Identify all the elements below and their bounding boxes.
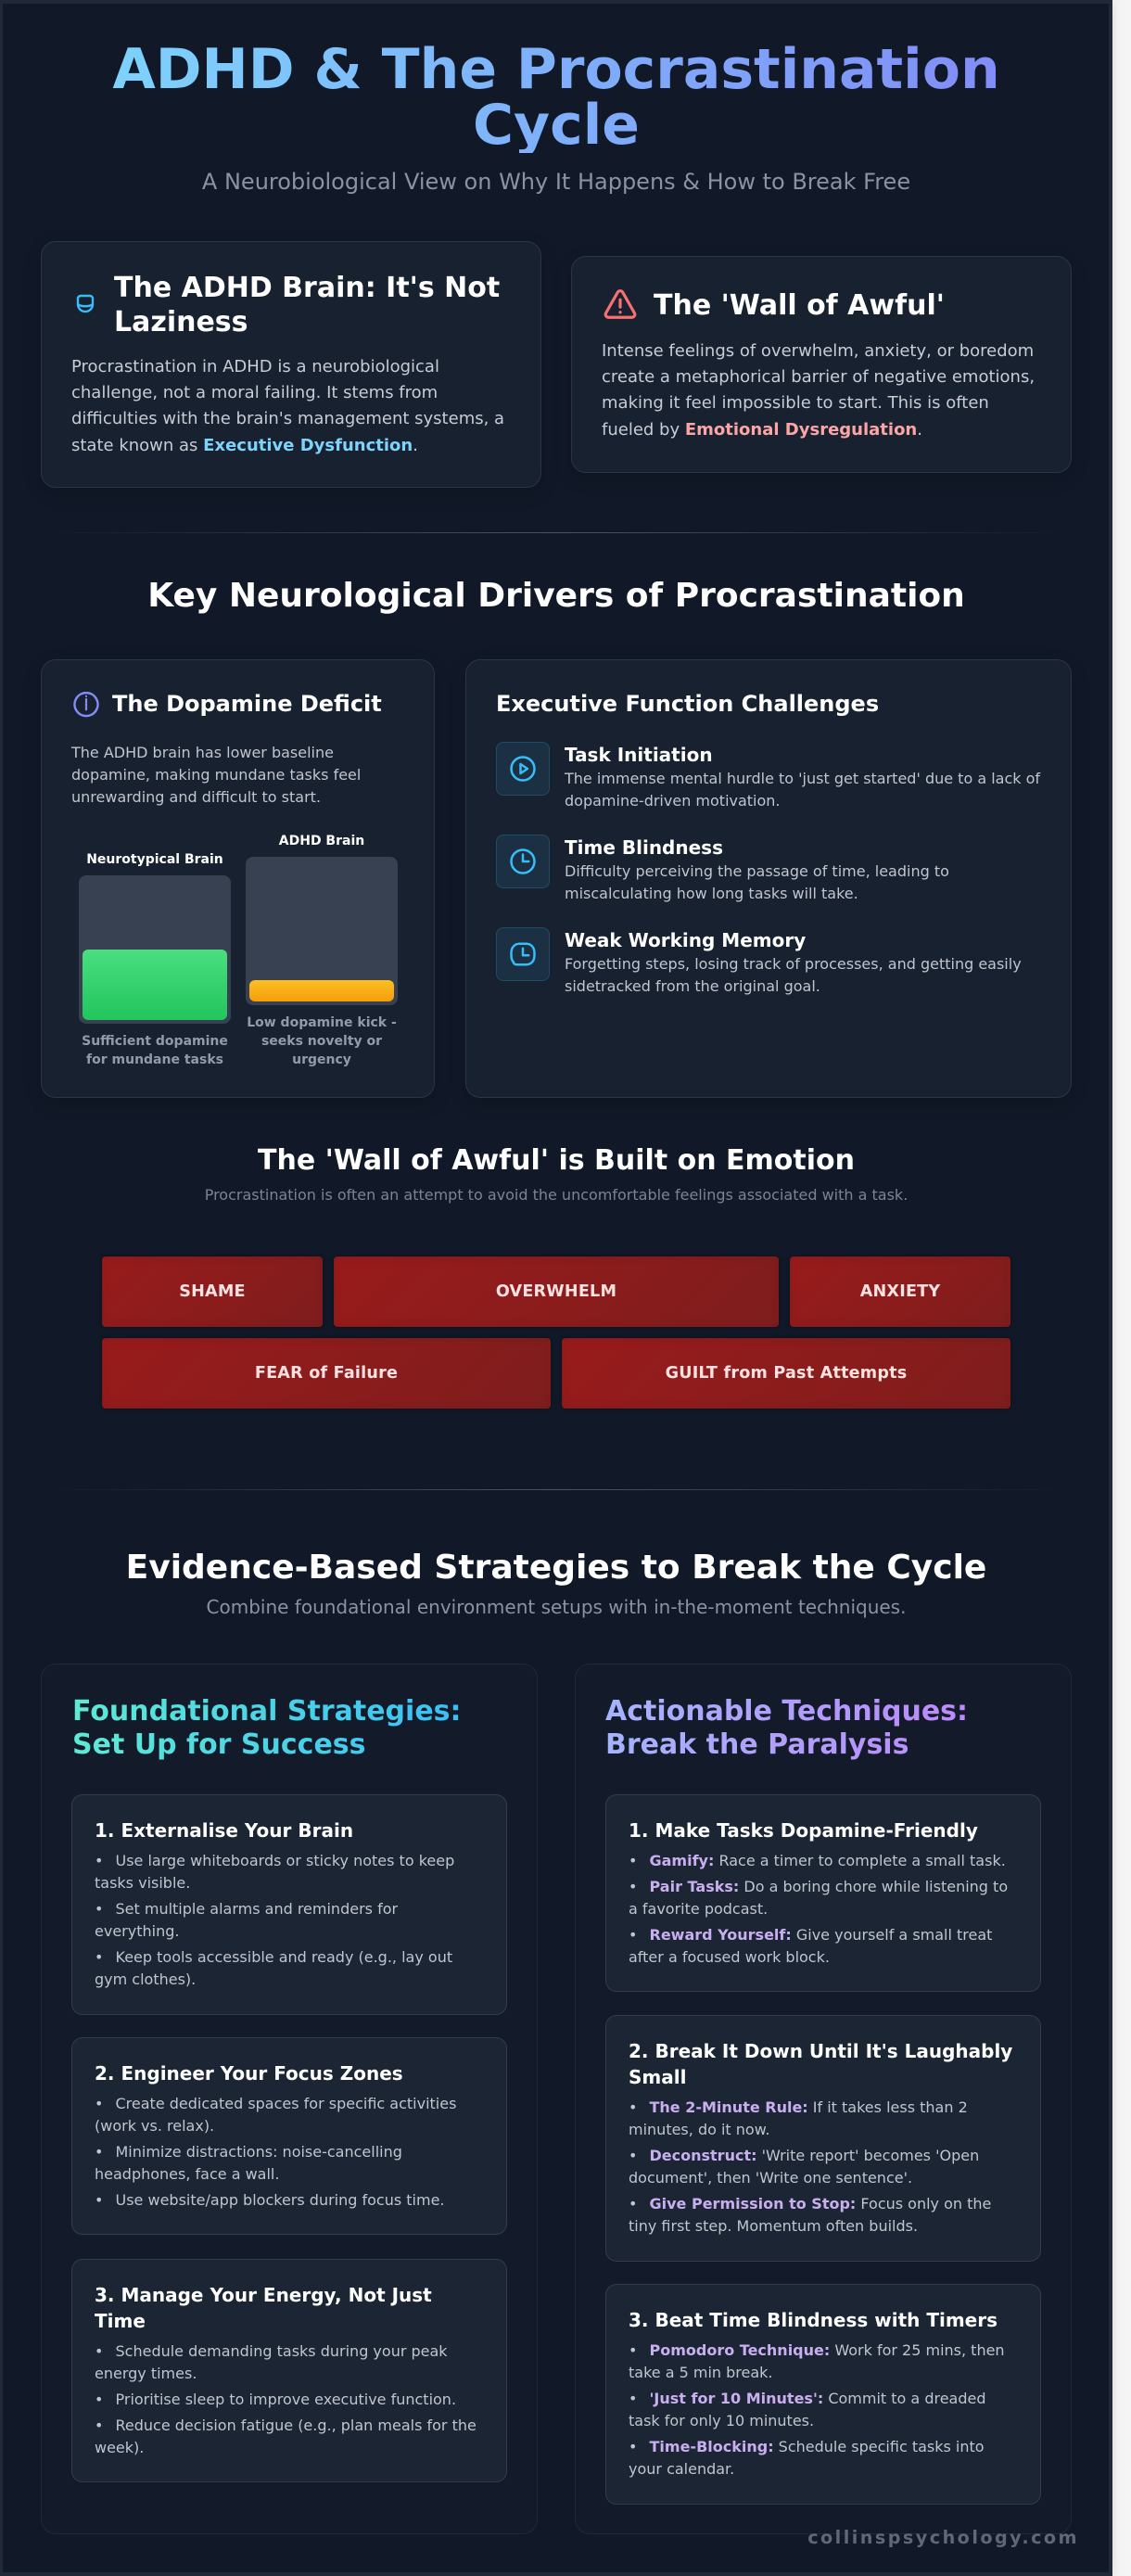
card list: • [629, 2195, 637, 2213]
card list: • [629, 2147, 637, 2164]
card list: • [629, 2341, 637, 2359]
card list: Pair Tasks: Do a boring chore while listening to a favorite podcast. [629, 1878, 1008, 1918]
card list: The 2-Minute Rule: If it takes less than 2 minutes, do it now. [629, 2098, 968, 2138]
section subheading: Procrastination is often an attempt to avoid the uncomfortable feelings associated with a task. [205, 1186, 908, 1204]
bar caption: Low dopamine kick - seeks novelty or urgency [247, 1015, 397, 1067]
card list: • [95, 2143, 103, 2161]
icon: info circle [73, 692, 99, 718]
heading: foundational strategies: Foundational Strategies: Set Up for Success [72, 1695, 462, 1761]
panel: the ADHD brain [41, 241, 541, 488]
bar fill [249, 980, 394, 1001]
panel heading: The Dopamine Deficit [112, 691, 382, 717]
card list: • [629, 1926, 637, 1944]
bar [246, 857, 398, 1005]
section heading: strategies: Evidence-Based Strategies to Break the Cycle [126, 1549, 986, 1587]
text: task initiation: The immense mental hurdle to 'just get started' due to a lack of dopamine-driven motivation. [565, 770, 1040, 810]
card list [95, 2342, 477, 2456]
card list: Deconstruct: 'Write report' becomes 'Open document', then 'Write one sentence'. [629, 2147, 979, 2187]
card list [95, 1852, 454, 1988]
card list: • [95, 1852, 103, 1869]
card list: • [95, 2095, 103, 2112]
card: externalise [71, 1794, 507, 2015]
card list: Pomodoro Technique: Work for 25 mins, then take a 5 min break. [629, 2341, 1005, 2381]
brick: shame: SHAME [179, 1282, 246, 1301]
text: time blindness: Time Blindness [565, 836, 723, 859]
heading: actionable techniques: Actionable Techniques: Break the Paralysis [605, 1695, 968, 1761]
panel text: Procrastination in ADHD is a neurobiological challenge, not a moral failing. It stems from difficulties with the brain's management systems, a state known as Executive Dysfunction. [71, 357, 504, 455]
card list: Give Permission to Stop: Focus only on the tiny first step. Momentum often builds. [629, 2195, 991, 2235]
brick: shame [102, 1256, 323, 1327]
card list: Reduce decision fatigue (e.g., plan meals for the week). [95, 2417, 477, 2456]
section heading: wall of emotion: The 'Wall of Awful' is Built on Emotion [258, 1144, 855, 1177]
card list: Prioritise sleep to improve executive function. [115, 2391, 456, 2408]
text: working memory [565, 929, 1022, 995]
section subheading: Combine foundational environment setups with in-the-moment techniques. [207, 1596, 906, 1618]
card list: Create dedicated spaces for specific activities (work vs. relax). [95, 2095, 456, 2135]
card list [95, 2095, 456, 2209]
brick: overwhelm: OVERWHELM [496, 1282, 616, 1301]
card list: • [95, 2417, 103, 2434]
icon: clock [496, 835, 550, 888]
heading: executive function: Executive Function Challenges [496, 691, 879, 717]
card list: • [95, 2342, 103, 2360]
text: working memory: Weak Working Memory [565, 929, 806, 951]
brick: guilt [562, 1338, 1010, 1409]
card list: • [629, 1878, 637, 1895]
card list: Minimize distractions: noise-cancelling headphones, face a wall. [95, 2143, 402, 2183]
card list: Use website/app blockers during focus time. [115, 2191, 445, 2209]
brick: fear [102, 1338, 551, 1409]
icon: memory [496, 927, 550, 981]
card list: • [95, 2191, 103, 2209]
subtitle: A Neurobiological View on Why It Happens & How to Break Free [202, 169, 910, 195]
card list: Keep tools accessible and ready (e.g., lay out gym clothes). [95, 1948, 452, 1988]
card: energy [71, 2259, 507, 2482]
panel text: The ADHD brain has lower baseline dopamine, making mundane tasks feel unrewarding and difficult to start. [71, 744, 361, 806]
card list: • [95, 1948, 103, 1966]
card heading: 1. Externalise Your Brain [95, 1819, 353, 1842]
text: time blindness [565, 836, 949, 902]
card: dopamine-friendly [605, 1794, 1041, 1992]
panel: executive function [465, 659, 1072, 1098]
panel heading: The ADHD Brain: It's Not Laziness [114, 272, 500, 338]
panel heading: The 'Wall of Awful' [654, 289, 945, 322]
bar fill [83, 950, 227, 1020]
card list: • [629, 2098, 637, 2116]
card list: Use large whiteboards or sticky notes to keep tasks visible. [95, 1852, 454, 1892]
chart: ADHD brain [246, 834, 398, 1067]
bar label: ADHD Brain [279, 834, 364, 848]
card heading: 3. Beat Time Blindness with Timers [629, 2309, 998, 2331]
card list: Gamify: Race a timer to complete a small task. [649, 1852, 1006, 1869]
card list: Set multiple alarms and reminders for everything. [95, 1900, 398, 1940]
card list: • [629, 1852, 637, 1869]
footer watermark: collinspsychology.com [807, 2527, 1079, 2548]
icon: play [496, 742, 550, 796]
card: break it down [605, 2015, 1041, 2262]
card list [629, 2098, 991, 2235]
chart: neurotypical brain [79, 852, 231, 1067]
card heading: 2. Engineer Your Focus Zones [95, 2062, 403, 2085]
brick: fear: FEAR of Failure [255, 1364, 398, 1383]
card list: 'Just for 10 Minutes': Commit to a dreaded task for only 10 minutes. [629, 2390, 986, 2429]
panel: dopamine deficit [41, 659, 435, 1098]
panel: wall of awful [571, 256, 1072, 473]
brick: anxiety: ANXIETY [860, 1282, 940, 1301]
bar label: Neurotypical Brain [86, 852, 223, 867]
card list: Schedule demanding tasks during your peak energy times. [95, 2342, 448, 2382]
section heading: neurological drivers: Key Neurological Drivers of Procrastination [147, 577, 965, 615]
card list: Time-Blocking: Schedule specific tasks into your calendar. [629, 2438, 985, 2478]
panel: foundational strategies [41, 1664, 538, 2534]
card heading: 2. Break It Down Until It's Laughably Small [629, 2040, 1012, 2088]
panel text: Intense feelings of overwhelm, anxiety, or boredom create a metaphorical barrier of negative emotions, making it feel impossible to start. This is often fueled by Emotional Dysregulation. [602, 341, 1035, 440]
card list: Reward Yourself: Give yourself a small treat after a focused work block. [629, 1926, 992, 1966]
card list [629, 2341, 1005, 2478]
panel: actionable techniques [575, 1664, 1072, 2534]
card list [629, 1852, 1008, 1966]
text: time blindness: Difficulty perceiving the passage of time, leading to miscalculating how long tasks will take. [565, 862, 949, 902]
card: focus zones [71, 2037, 507, 2235]
card list: • [95, 2391, 103, 2408]
card: timers [605, 2284, 1041, 2505]
bar [79, 875, 231, 1024]
title: ADHD & The Procrastination Cycle [112, 37, 1000, 158]
brick: anxiety [790, 1256, 1010, 1327]
brick: overwhelm [334, 1256, 779, 1327]
icon: warning triangle [604, 289, 636, 319]
icon: brain [76, 295, 95, 313]
card list: • [95, 1900, 103, 1918]
bar caption: Sufficient dopamine for mundane tasks [82, 1034, 228, 1067]
text: working memory: Forgetting steps, losing track of processes, and getting easily sidetracked from the original goal. [565, 955, 1022, 995]
card list: • [629, 2438, 637, 2455]
brick: guilt: GUILT from Past Attempts [666, 1364, 907, 1383]
card list: • [629, 2390, 637, 2407]
text: task initiation: Task Initiation [565, 744, 713, 766]
card heading: 3. Manage Your Energy, Not Just Time [95, 2284, 432, 2332]
card heading: 1. Make Tasks Dopamine-Friendly [629, 1819, 978, 1842]
brick wall [102, 1256, 1010, 1409]
text: task initiation [564, 744, 1040, 810]
